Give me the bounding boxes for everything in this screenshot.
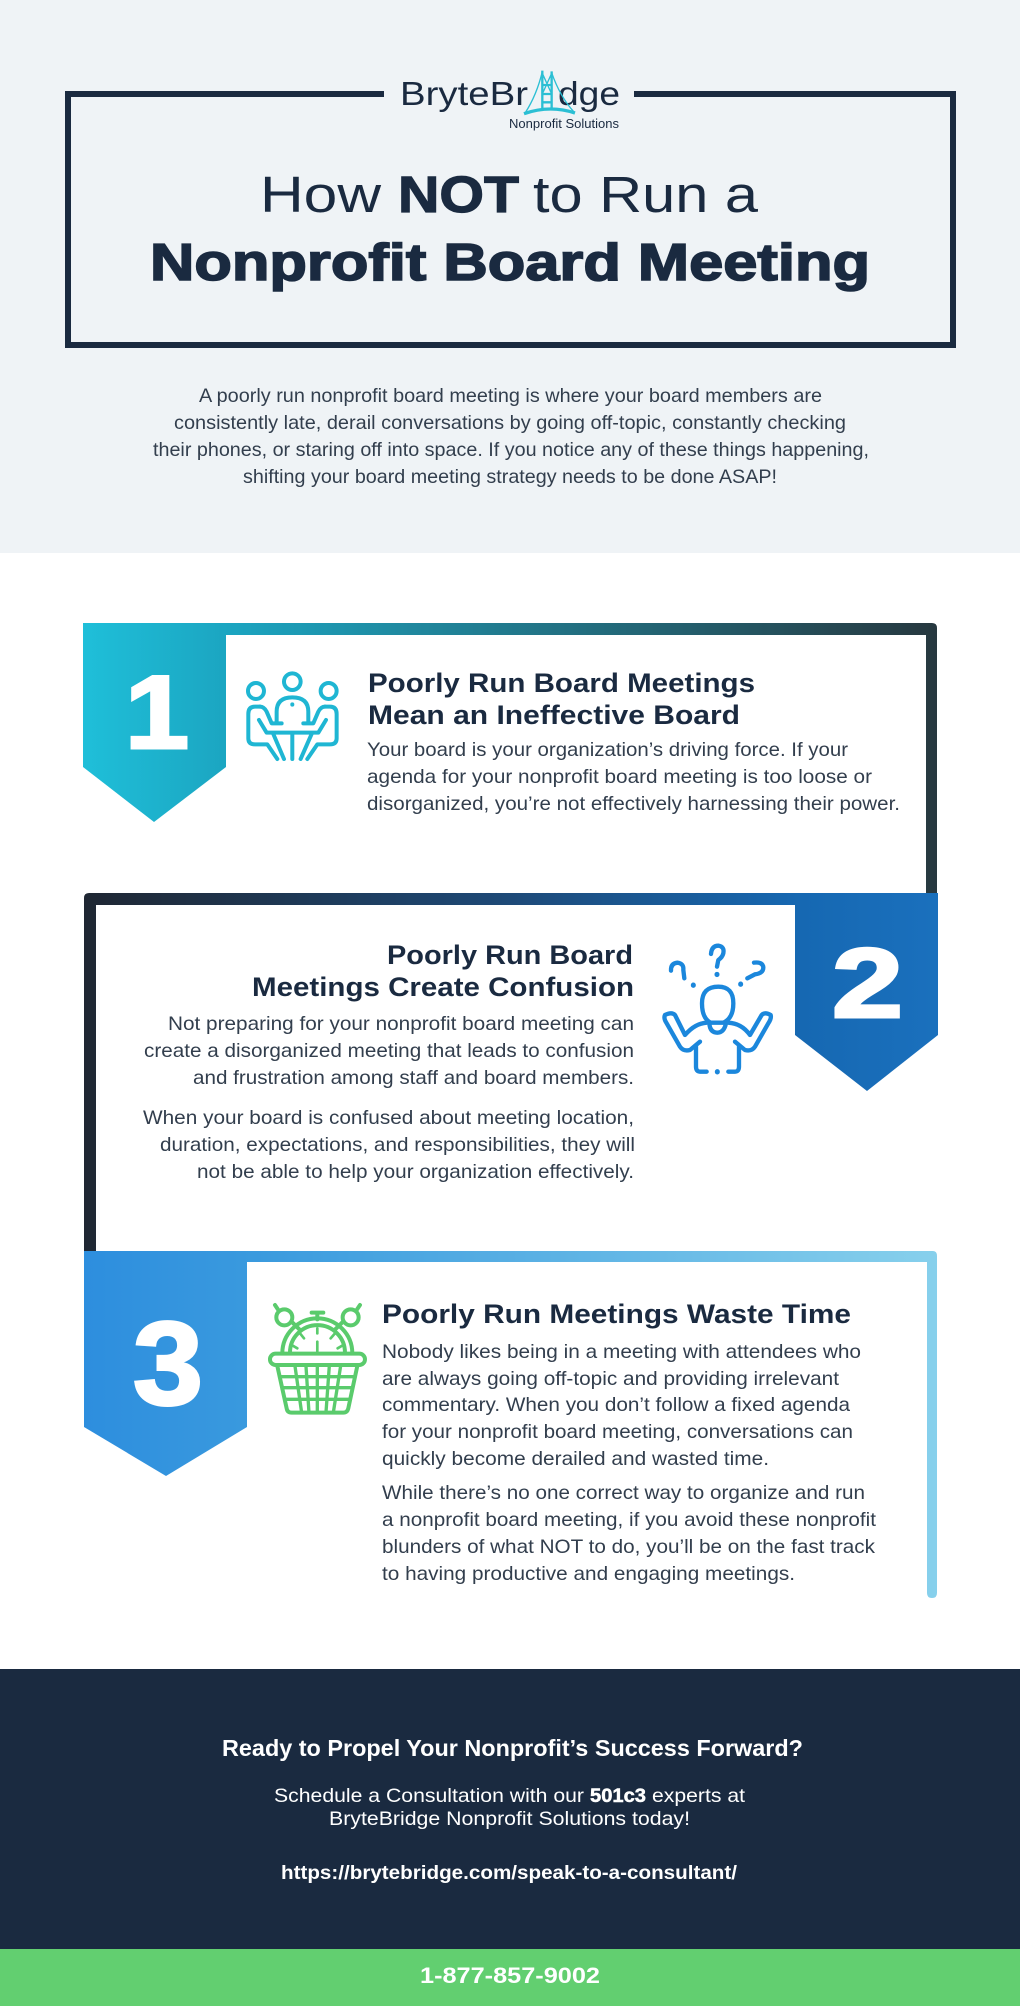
- text: section 1 body: [367, 739, 900, 815]
- panel: section 1: [83, 623, 937, 893]
- heading: section 3: Poorly Run Meetings Waste Time: [382, 1299, 851, 1329]
- text: section 3 body: Nobody likes being in a meeting with attendees who: [382, 1341, 861, 1363]
- text: section 2 body: create a disorganized meeting that leads to confusion: [144, 1040, 634, 1062]
- ribbon: number 1: 1: [125, 655, 189, 771]
- heading: section 2: Poorly Run Board: [387, 940, 633, 970]
- text: section 2 body: [143, 1013, 635, 1183]
- text: section 3 body: quickly become derailed and wasted time.: [382, 1448, 769, 1470]
- text: section 3 body: commentary. When you don’t follow a fixed agenda: [382, 1394, 850, 1416]
- panel: footer call to action: [0, 1669, 1020, 1949]
- text: section 3 body: blunders of what NOT to do, you’ll be on the fast track: [382, 1536, 875, 1558]
- text: section 3 body: [382, 1341, 877, 1585]
- heading: section 1: [368, 668, 755, 730]
- section 3 border: [84, 1251, 937, 1598]
- panel: header background: [0, 0, 1020, 553]
- ribbon: number 2: 2: [832, 928, 903, 1038]
- text: section 3 body: to having productive and engaging meetings.: [382, 1563, 795, 1585]
- footer link: https://brytebridge.com/speak-to-a-consultant/: [281, 1863, 738, 1884]
- heading: section 2: [252, 940, 634, 1002]
- footer text: Schedule a Consultation with our: [274, 1785, 585, 1807]
- logo: BryteBridge: Nonprofit Solutions: [509, 116, 619, 131]
- title: Nonprofit Board Meeting: [150, 234, 870, 292]
- intro paragraph: their phones, or staring off into space. If you notice any of these things happening,: [153, 439, 869, 461]
- title: to Run a: [533, 166, 759, 223]
- ribbon: number 1: [83, 623, 226, 822]
- ribbon: number 3: 3: [133, 1298, 203, 1430]
- title: How: [260, 166, 381, 223]
- logo: BryteBridge: BryteBr: [400, 75, 528, 112]
- footer text: experts at: [652, 1785, 746, 1807]
- title: NOT: [398, 166, 519, 223]
- text: section 2 body: Not preparing for your nonprofit board meeting can: [168, 1013, 634, 1035]
- intro paragraph: A poorly run nonprofit board meeting is where your board members are: [199, 385, 822, 407]
- footer text: [274, 1785, 746, 1830]
- footer heading: Ready to Propel Your Nonprofit’s Success Forward?: [222, 1735, 803, 1761]
- section 1 border: [83, 623, 937, 893]
- footer text: BryteBridge Nonprofit Solutions today!: [329, 1808, 690, 1830]
- text: section 1 body: disorganized, you’re not effectively harnessing their power.: [367, 793, 900, 815]
- icon: people at a table: [248, 673, 337, 759]
- title frame: [68, 94, 953, 345]
- text: section 2 body: When your board is confused about meeting location,: [143, 1107, 634, 1129]
- logo: BryteBridge: dge: [558, 75, 620, 112]
- text: section 3 body: a nonprofit board meeting, if you avoid these nonprofit: [382, 1509, 877, 1531]
- text: section 2 body: not be able to help your organization effectively.: [197, 1161, 634, 1183]
- ribbon: number 3: [84, 1251, 247, 1476]
- text: section 3 body: are always going off-topic and providing irrelevant: [382, 1368, 840, 1390]
- phone number: 1-877-857-9002: [420, 1963, 600, 1988]
- icon: confused person: [664, 946, 771, 1072]
- icon: bridge: [524, 71, 575, 114]
- icon: basket with stopwatch: [270, 1305, 365, 1413]
- heading: section 1: Poorly Run Board Meetings: [368, 668, 755, 698]
- logo: BryteBridge: [400, 71, 620, 131]
- section 2 border: [84, 893, 795, 1252]
- panel: section 2: [84, 893, 938, 1252]
- text: section 2 body: duration, expectations, and responsibilities, they will: [160, 1134, 635, 1156]
- text: section 3 body: for your nonprofit board meeting, conversations can: [382, 1421, 853, 1443]
- text: section 3 body: While there’s no one correct way to organize and run: [382, 1482, 865, 1504]
- ribbon: number 2: [795, 893, 938, 1091]
- intro paragraph: shifting your board meeting strategy needs to be done ASAP!: [243, 466, 777, 488]
- title: [150, 166, 870, 292]
- footer text: 501c3: [590, 1785, 646, 1807]
- text: section 2 body: and frustration among staff and board members.: [193, 1067, 634, 1089]
- panel: section 3: [84, 1251, 937, 1598]
- text: section 1 body: agenda for your nonprofit board meeting is too loose or: [367, 766, 873, 788]
- text: section 1 body: Your board is your organization’s driving force. If your: [367, 739, 849, 761]
- panel: phone bar: [0, 1949, 1020, 2006]
- heading: section 2: Meetings Create Confusion: [252, 972, 634, 1002]
- heading: section 1: Mean an Ineffective Board: [368, 700, 740, 730]
- intro paragraph: consistently late, derail conversations by going off-topic, constantly checking: [174, 412, 846, 434]
- intro paragraph: [153, 385, 869, 488]
